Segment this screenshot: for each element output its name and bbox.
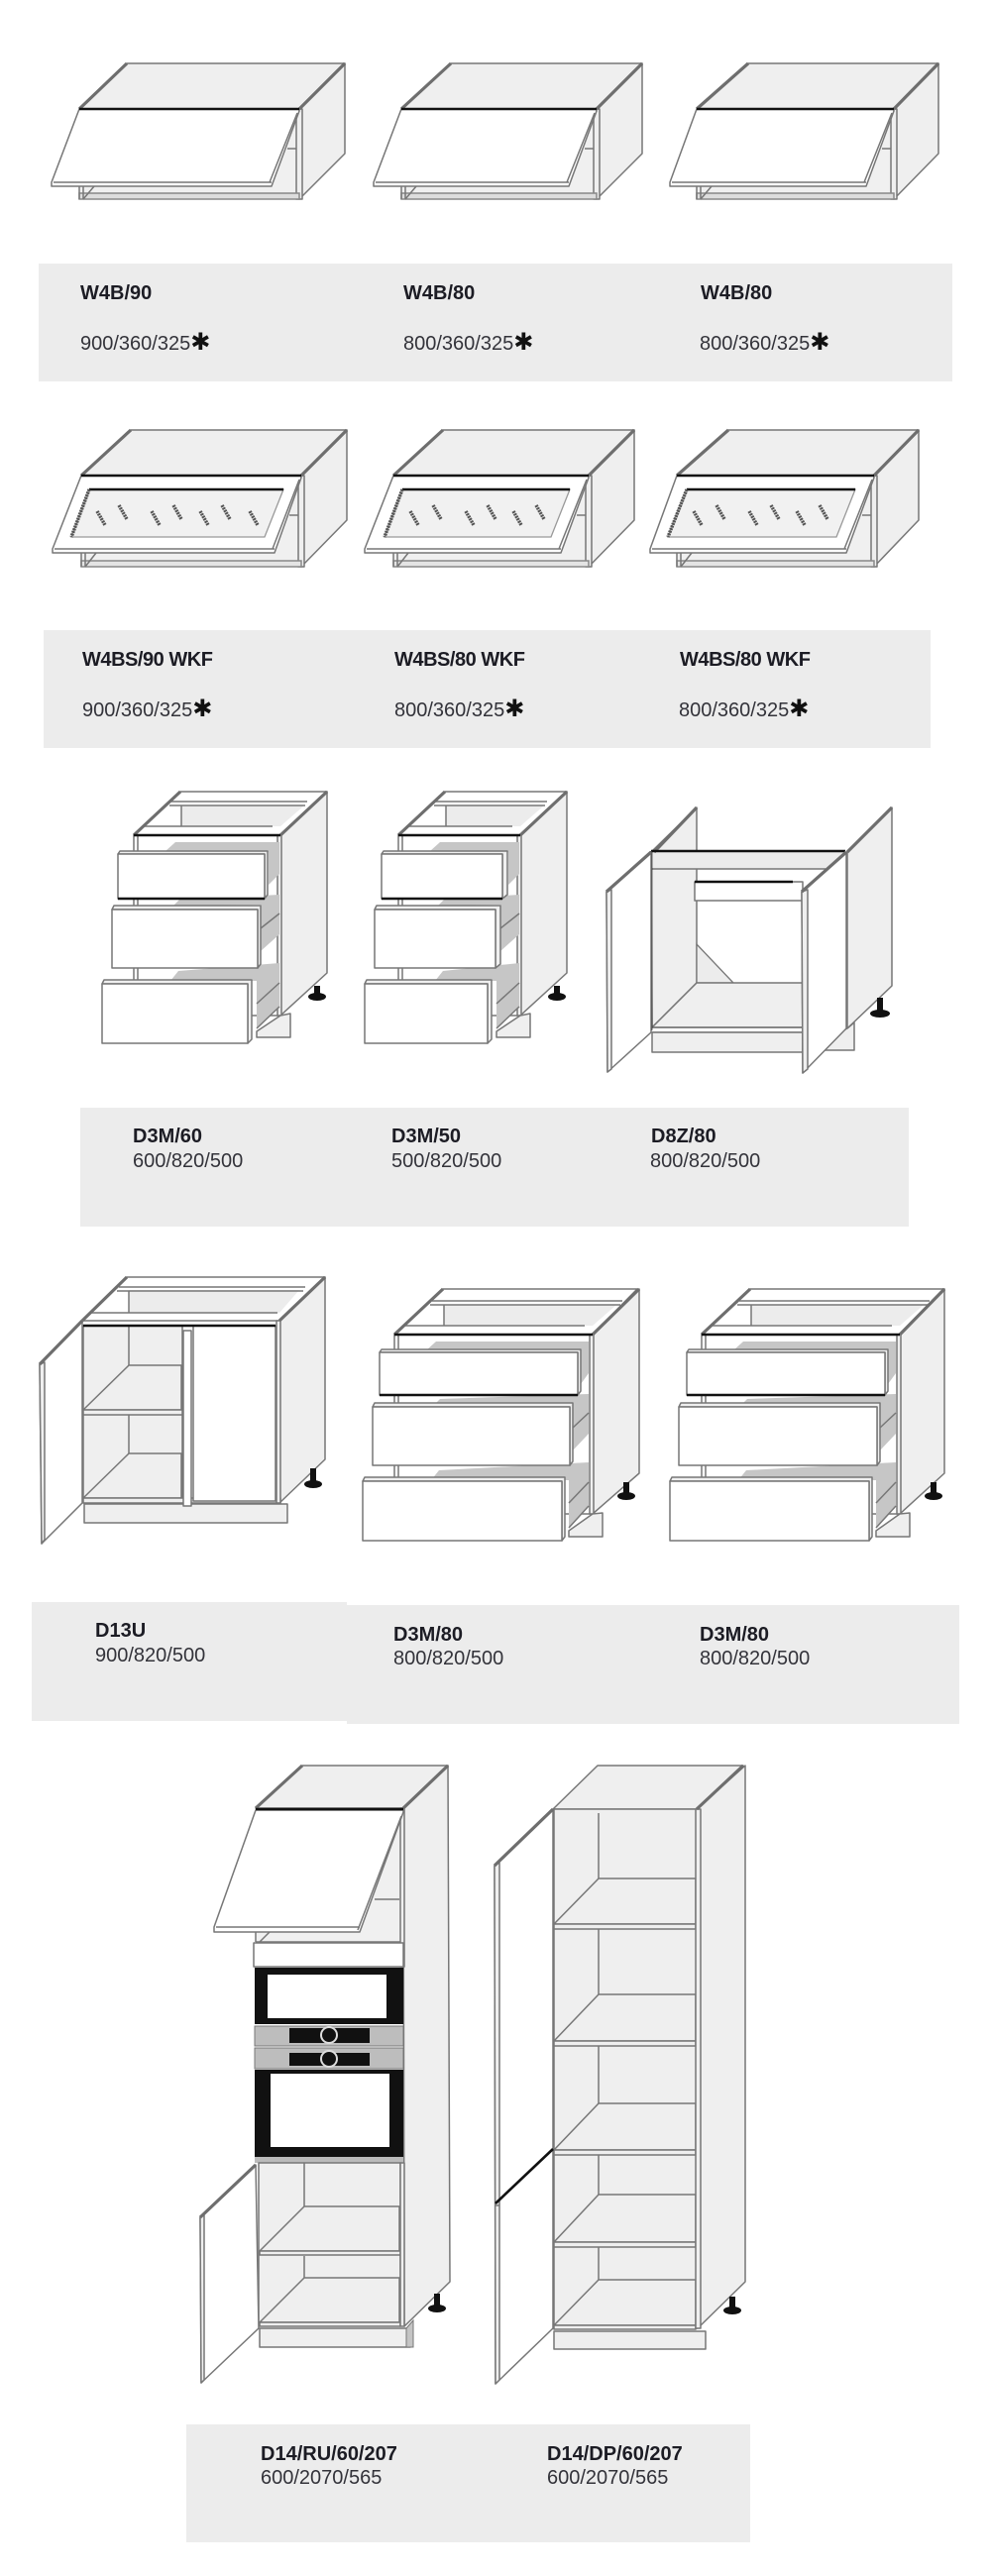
label: D8Z/80: D8Z/80 xyxy=(651,1126,716,1147)
cabinet: D8Z/80 sink base with open doors xyxy=(606,807,892,1073)
panel: row 3 labels xyxy=(80,1108,909,1227)
label: D3M/50 xyxy=(391,1126,501,1172)
cabinet: W4BS/80 WKF right glass xyxy=(650,430,919,567)
cabinet: W4B/80 right xyxy=(670,63,938,199)
panel: row 1 labels xyxy=(39,264,952,381)
cabinet: D3M/80 right drawers xyxy=(670,1289,944,1541)
label: D13U: D13U xyxy=(95,1620,146,1642)
label: W4B/80 centre: W4B/80 xyxy=(403,282,475,304)
label: D3M/60: 600/820/500 xyxy=(133,1150,243,1172)
label: D8Z/80: 800/820/500 xyxy=(650,1150,760,1172)
label: W4B/80 right: W4B/80 xyxy=(701,282,772,304)
cabinet: D3M/50 drawers xyxy=(365,792,567,1043)
label: W4B/80 right xyxy=(700,282,829,356)
label: D14/DP/60/207: 600/2070/565 xyxy=(547,2467,668,2489)
label: D3M/80 centre: 800/820/500 xyxy=(393,1648,503,1669)
label: D14/RU/60/207: D14/RU/60/207 xyxy=(261,2443,397,2465)
label: D3M/60: D3M/60 xyxy=(133,1126,202,1147)
label: D3M/50: D3M/50 xyxy=(391,1126,461,1147)
label: D14/DP/60/207: D14/DP/60/207 xyxy=(547,2443,683,2465)
label: W4BS/80 WKF right xyxy=(679,649,811,722)
label: D13U xyxy=(95,1620,205,1666)
cabinet: W4B/80 centre xyxy=(374,63,642,199)
label: D3M/80 right: 800/820/500 xyxy=(700,1648,810,1669)
label: W4BS/80 WKF centre xyxy=(394,649,525,722)
label: W4BS/80 WKF right: 800/360/325✱ xyxy=(679,695,809,722)
cabinet: W4BS/90 WKF glass xyxy=(53,430,347,567)
oven: upper compact oven xyxy=(255,1968,403,2024)
label: D14/RU/60/207 xyxy=(261,2443,397,2489)
label: D3M/80 centre xyxy=(393,1624,503,1669)
label: W4B/90: 900/360/325✱ xyxy=(80,328,210,356)
label: W4B/80 right: 800/360/325✱ xyxy=(700,328,829,356)
cabinet: D14/RU/60/207 tall oven unit xyxy=(200,1766,450,2383)
label: W4BS/90 WKF xyxy=(82,649,213,722)
cabinet: D13U corner base xyxy=(40,1277,325,1544)
label: W4B/80 centre: 800/360/325✱ xyxy=(403,328,533,356)
cabinet: D3M/80 centre drawers xyxy=(363,1289,639,1541)
cabinet: D3M/60 drawers xyxy=(102,792,327,1043)
label: W4BS/80 WKF right: W4BS/80 WKF xyxy=(680,649,811,671)
oven: control panels xyxy=(255,2026,403,2069)
panel: row 5 labels xyxy=(186,2424,750,2542)
label: W4B/80 centre xyxy=(403,282,533,356)
panel: row 4 labels xyxy=(32,1602,959,1724)
label: D14/DP/60/207 xyxy=(547,2443,683,2489)
label: W4BS/80 WKF centre: W4BS/80 WKF xyxy=(394,649,525,671)
oven: lower oven xyxy=(255,2070,403,2157)
cabinet: W4BS/80 WKF centre glass xyxy=(365,430,634,567)
cabinet: W4B/90 xyxy=(52,63,345,199)
label: D13U: 900/820/500 xyxy=(95,1645,205,1666)
label: D3M/60 xyxy=(133,1126,243,1172)
label: W4BS/90 WKF: W4BS/90 WKF xyxy=(82,649,213,671)
label: D8Z/80 xyxy=(650,1126,760,1172)
label: D3M/80 right: D3M/80 xyxy=(700,1624,769,1646)
label: D3M/50: 500/820/500 xyxy=(391,1150,501,1172)
label: W4BS/90 WKF: 900/360/325✱ xyxy=(82,695,212,722)
panel: row 2 labels xyxy=(44,630,931,748)
label: W4B/90: W4B/90 xyxy=(80,282,152,304)
label: W4B/90 xyxy=(80,282,210,356)
cabinet: D14/DP/60/207 tall larder unit xyxy=(495,1766,745,2384)
label: W4BS/80 WKF centre: 800/360/325✱ xyxy=(394,695,524,722)
label: D3M/80 right xyxy=(700,1624,810,1669)
label: D14/RU/60/207: 600/2070/565 xyxy=(261,2467,382,2489)
label: D3M/80 centre: D3M/80 xyxy=(393,1624,463,1646)
